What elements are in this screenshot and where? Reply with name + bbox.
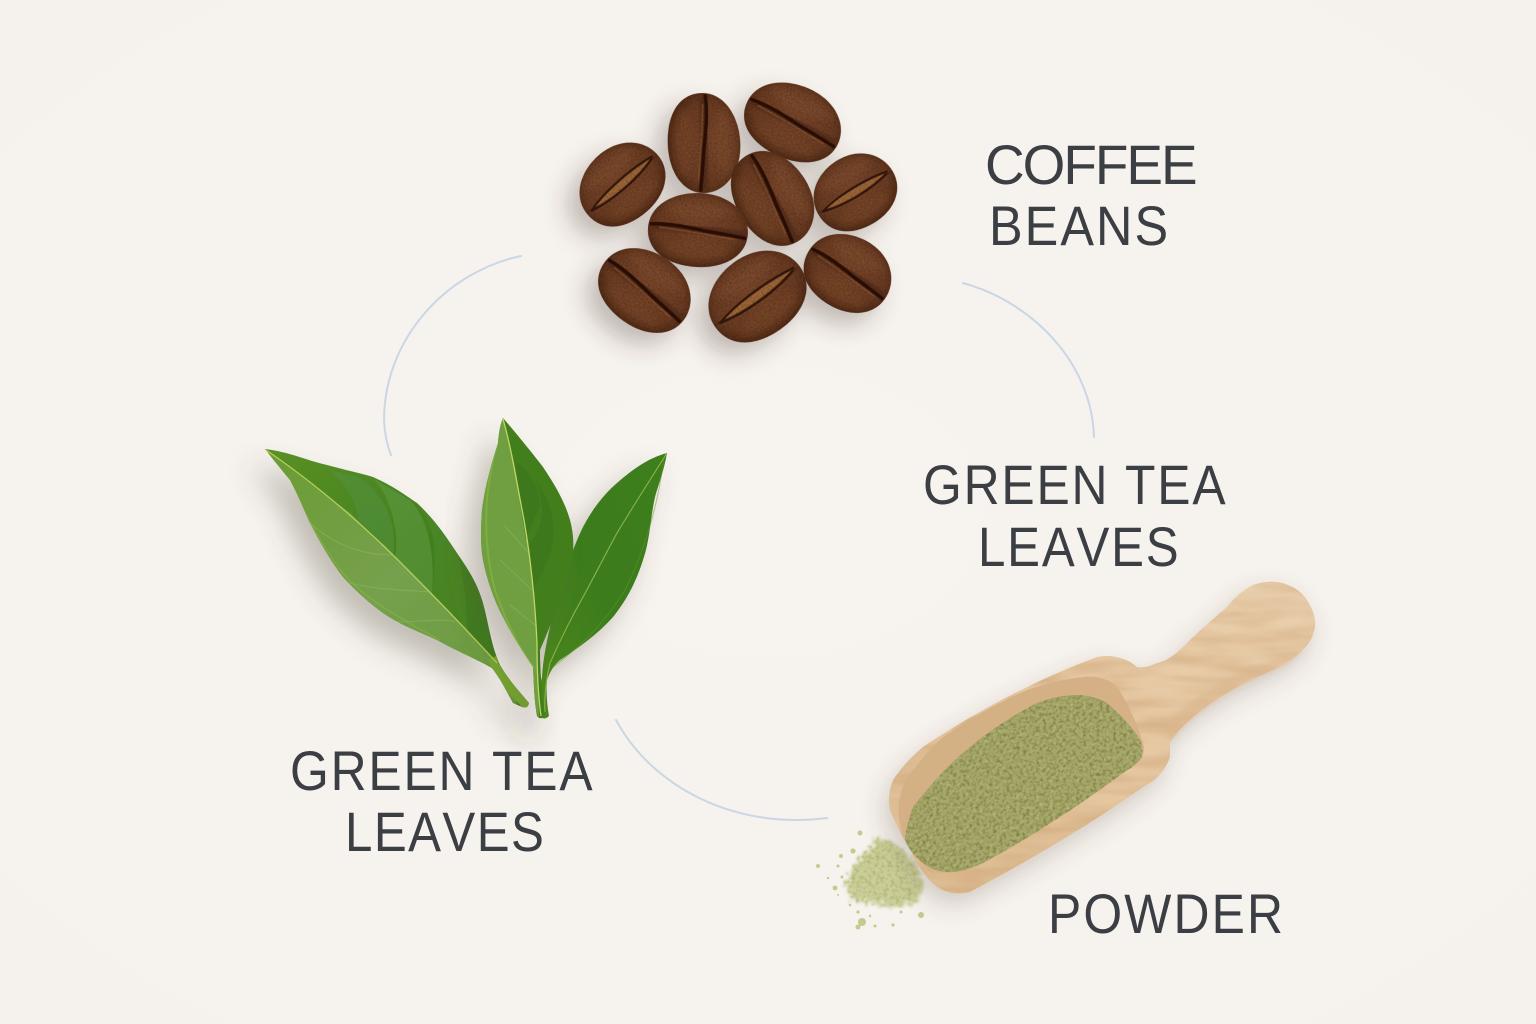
infographic canvas	[248, 81, 1320, 934]
label: green tea leaves (left): GREEN TEA	[290, 740, 593, 803]
label: green tea leaves (right): LEAVES	[978, 516, 1179, 579]
label: green tea leaves (left)	[290, 740, 593, 864]
bean: middle	[646, 190, 750, 270]
leaf: large left	[265, 449, 532, 710]
cycle arc: leaves to beans	[384, 256, 521, 455]
scoop handle shading	[1165, 650, 1303, 743]
scoop inner wall	[898, 677, 1144, 873]
label: coffee beans: COFFEE	[985, 133, 1198, 196]
spilled powder	[816, 830, 924, 930]
bean: left	[563, 126, 681, 242]
label: green tea leaves (right): GREEN TEA	[923, 454, 1226, 517]
bean: top middle	[666, 92, 742, 194]
wooden scoop with powder	[816, 582, 1315, 930]
leaf: middle upright	[475, 418, 573, 720]
leaf: narrow right	[539, 453, 667, 718]
cycle arc: beans to tea leaves	[963, 283, 1094, 437]
bean: bottom right	[791, 218, 905, 328]
bean: bottom left	[583, 231, 707, 349]
label: green tea leaves (left): LEAVES	[345, 801, 544, 864]
coffee beans cluster	[563, 67, 910, 359]
green tea leaves	[265, 418, 667, 720]
powder in scoop	[905, 695, 1143, 872]
cycle arc: powder to leaves	[616, 720, 827, 820]
bean: right	[800, 139, 910, 245]
bean: centre	[716, 136, 830, 260]
label: green tea leaves (right)	[923, 454, 1226, 579]
bean: top right	[732, 67, 854, 177]
bean: bottom middle	[691, 233, 823, 359]
label: coffee beans: BEANS	[989, 196, 1168, 258]
label: coffee beans	[985, 133, 1198, 258]
scoop body	[889, 582, 1315, 893]
label: powder: POWDER	[1048, 883, 1283, 946]
